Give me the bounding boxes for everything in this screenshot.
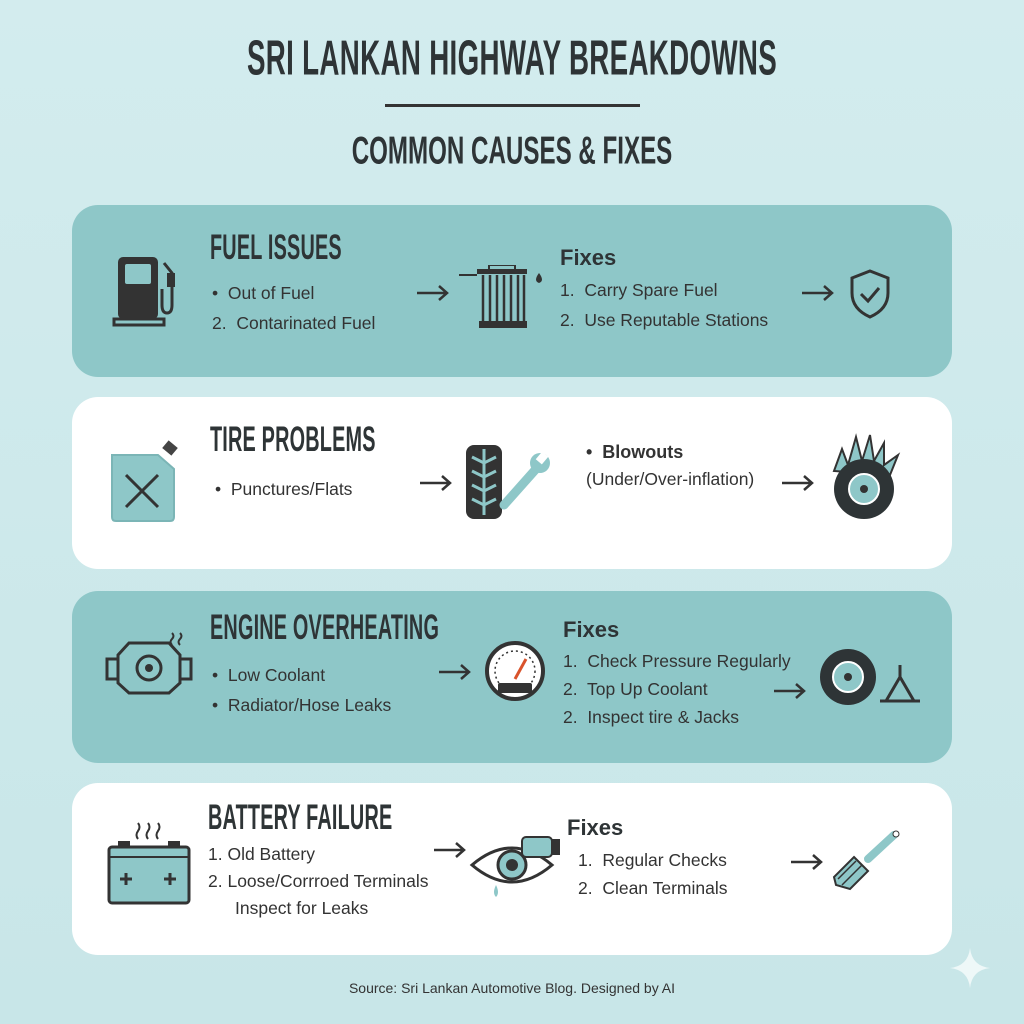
arrow: [791, 854, 823, 870]
causes list: [212, 283, 375, 333]
panel: tire problems: [72, 397, 952, 569]
causes list: • Radiator/Hose Leaks: [212, 695, 391, 715]
panel: battery failure: 2. Clean Terminals: [578, 878, 727, 898]
icon: engine: [106, 632, 192, 694]
arrow: [417, 285, 449, 301]
icon: shield: [850, 269, 890, 319]
causes list: 2. Loose/Corrroed Terminals: [208, 871, 428, 891]
causes list: 2. Contarinated Fuel: [212, 313, 375, 333]
panel: engine overheating: 2. Inspect tire & Jacks: [563, 707, 739, 727]
panel: tire problems: (Under/Over-inflation): [586, 469, 754, 489]
fixes: Fixes: [560, 245, 616, 270]
causes list: [212, 665, 391, 715]
source footer: Source: Sri Lankan Automotive Blog. Designed by AI: [349, 980, 675, 996]
icon: tire with wrench: [466, 445, 550, 519]
subtitle: COMMON CAUSES & FIXES: [352, 129, 672, 173]
icon: jerrycan: [111, 440, 178, 522]
icon: brush: [832, 830, 900, 890]
panel: battery failure: [72, 783, 952, 955]
heading: ENGINE OVERHEATING: [210, 607, 439, 647]
causes list: [208, 844, 428, 918]
heading: FUEL ISSUES: [210, 227, 342, 267]
icon: burst tire: [832, 433, 900, 519]
icon: gauge: [485, 641, 545, 701]
arrow: [439, 664, 471, 680]
fixes: • Blowouts: [586, 442, 683, 462]
panel: fuel issues: 1. Carry Spare Fuel: [560, 280, 718, 300]
fixes: Fixes: [567, 815, 623, 840]
icon: filter: [459, 265, 542, 328]
panel: fuel issues: [72, 205, 952, 377]
heading: BATTERY FAILURE: [208, 797, 392, 837]
causes list: 1. Old Battery: [208, 844, 315, 864]
arrow: [434, 842, 466, 858]
arrow: [782, 475, 814, 491]
heading: TIRE PROBLEMS: [210, 419, 376, 459]
icon: sparkle: [950, 948, 990, 988]
icon: wheel and jack: [820, 649, 920, 705]
causes list: • Punctures/Flats: [215, 479, 352, 499]
panel: fuel issues: 2. Use Reputable Stations: [560, 310, 768, 330]
causes list: Inspect for Leaks: [235, 898, 368, 918]
panel: engine overheating: [72, 591, 952, 763]
icon: eye inspection: [470, 836, 560, 897]
arrow: [774, 683, 806, 699]
icon: fuel pump: [112, 257, 175, 326]
panel: engine overheating: 1. Check Pressure Regularly: [563, 651, 791, 671]
causes list: • Out of Fuel: [212, 283, 314, 303]
title: SRI LANKAN HIGHWAY BREAKDOWNS: [247, 30, 777, 85]
causes list: • Low Coolant: [212, 665, 325, 685]
icon: battery: [108, 822, 190, 904]
panel: engine overheating: 2. Top Up Coolant: [563, 679, 708, 699]
arrow: [420, 475, 452, 491]
fixes: Fixes: [563, 617, 619, 642]
arrow: [802, 285, 834, 301]
panel: battery failure: 1. Regular Checks: [578, 850, 727, 870]
